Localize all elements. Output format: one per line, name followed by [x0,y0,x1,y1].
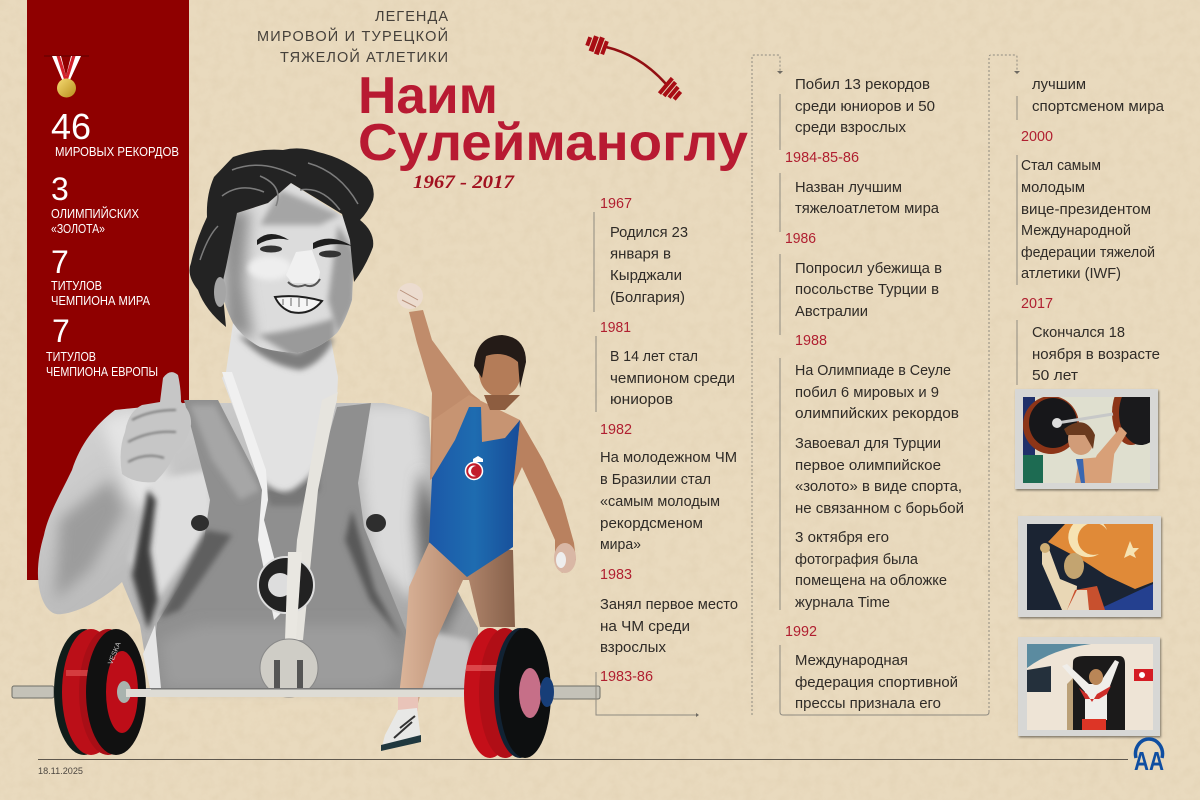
title: athlete name: Сулейманоглу [358,114,748,172]
bar [12,686,600,699]
heading: subtitle: МИРОВОЙ И ТУРЕЦКОЙ [257,27,448,45]
title: athlete name [358,67,748,172]
timeline column 2: посольстве Турции в [795,282,939,298]
timeline column 1: Кырджали [610,268,682,284]
singlet [429,407,520,577]
panel: red statistics column [27,0,189,580]
timeline column 2: олимпийских рекордов [795,406,959,422]
timeline column 2: 1984-85-86 [785,150,859,166]
head [479,347,521,397]
photo: greeting from the aeroplane door [1018,637,1160,736]
stat: 3 Olympic golds [51,171,139,236]
timeline column 1: 1982 [600,422,632,438]
face [222,183,354,353]
stat: 3 Olympic golds: «ЗОЛОТА» [51,221,105,236]
icon: medal [44,56,89,98]
singlet emblem [466,456,483,480]
illustration: barbell [12,628,600,758]
heading: subtitle: ТЯЖЕЛОЙ АТЛЕТИКИ [280,48,448,66]
stat: 7 European titles: 7 [52,313,70,349]
timeline column 3: атлетики (IWF) [1021,266,1121,282]
timeline column 2: Попросил убежища в [795,261,942,277]
right arm [513,420,576,573]
timeline column 2: фотография была [795,552,919,568]
stat: 46 world records: 46 [51,106,91,147]
timeline column 3: 2017 [1021,296,1053,312]
timeline column 3: лучшим [1032,77,1086,93]
stat: 7 world titles: 7 [51,244,69,280]
left plates [54,629,151,755]
stat: 7 European titles: ТИТУЛОВ [46,349,96,364]
timeline column 2: «золото» в виде спорта, [795,479,962,495]
medals [258,557,314,613]
timeline column 1: 1967 [600,196,632,212]
neck and V of chest [222,323,338,498]
stat: 46 world records [51,106,179,159]
timeline column 1: юниоров [610,392,673,408]
raised arm [409,310,480,480]
timeline column 1: января в [610,246,671,262]
timeline column 2: Международная [795,653,908,669]
timeline column 1: мира» [600,537,641,553]
stat: 46 world records: МИРОВЫХ РЕКОРДОВ [55,144,179,159]
torso [432,395,520,490]
timeline column 2: первое олимпийское [795,458,941,474]
stat: 7 world titles: ТИТУЛОВ [51,278,102,293]
timeline column 1: (Болгария) [610,290,685,306]
stat: 3 Olympic golds: 3 [51,171,69,207]
timeline column 2: тяжелоатлетом мира [795,201,940,217]
timeline column 1: На молодежном ЧМ [600,450,737,466]
logo: Anadolu Agency [1134,739,1164,776]
right plates [464,628,554,758]
timeline column 2: 1988 [795,333,827,349]
timeline column 3: молодым [1021,180,1085,196]
illustration: athlete in blue singlet, arm raised [381,283,576,751]
logo: Anadolu Agency: AA [1134,746,1164,776]
timeline column 3: 2000 [1021,129,1053,145]
timeline column 1: в Бразилии стал [600,472,711,488]
timeline column 2: среди юниоров и 50 [795,99,935,115]
timeline column 1: на ЧМ среди [600,619,690,635]
timeline column 3: 50 лет [1032,368,1078,384]
stat: 7 world titles [51,244,150,308]
heading: subtitle: ЛЕГЕНДА [375,9,448,25]
shoe [381,708,421,750]
timeline column 1: Родился 23 [610,225,688,241]
stat: 3 Olympic golds: ОЛИМПИЙСКИХ [51,206,139,221]
icon: curved barbell [584,33,685,104]
title: life dates: 1967 - 2017 [413,172,516,193]
date: 18.11.2025 [38,766,83,777]
legs [398,543,515,707]
stat: 7 European titles: ЧЕМПИОНА ЕВРОПЫ [46,364,158,379]
torso and arm [38,403,478,688]
ear [214,277,226,307]
ribbons [222,372,282,620]
timeline column 3: вице-президентом [1021,202,1151,218]
fist and thumb [121,372,191,482]
timeline column 2 [785,77,964,712]
timeline column 2: 3 октября его [795,530,889,546]
hair [190,148,374,327]
timeline column 1 [600,196,738,685]
timeline connectors [594,55,1017,715]
heading: subtitle [257,9,448,66]
photo: lifting the barbell [1015,381,1163,489]
timeline column 2: На Олимпиаде в Сеуле [795,363,951,379]
timeline column 3: ноября в возрасте [1032,347,1160,363]
timeline column 2: Назван лучшим [795,180,902,196]
arrowheads [696,71,1020,717]
timeline column 1: 1981 [600,320,631,336]
timeline column 2: побил 6 мировых и 9 [795,385,939,401]
timeline column 2: помещена на обложке [795,573,947,589]
timeline column 3: спортсменом мира [1032,99,1165,115]
timeline column 1: взрослых [600,640,667,656]
timeline column 3: Международной [1021,223,1131,239]
timeline column 2: Австралии [795,304,868,320]
timeline column 1: В 14 лет стал [610,349,698,365]
timeline column 1: рекордсменом [600,516,703,532]
illustration: large black-and-white portrait of the athlete [38,148,478,697]
sock [398,697,418,711]
timeline column 3: Стал самым [1021,158,1101,174]
timeline column 3: Скончался 18 [1032,325,1125,341]
timeline column 1: 1983-86 [600,669,653,685]
chest details [191,515,209,531]
photo: waving the Turkish flag [1018,516,1161,617]
title: athlete name: Наим [358,67,498,125]
timeline column 2: 1986 [785,231,816,247]
facial features [257,234,352,249]
footer rule [38,758,1128,760]
timeline column 2: не связанном с борьбой [795,501,964,517]
timeline column 3: федерации тяжелой [1021,245,1155,261]
timeline column 2: Побил 13 рекордов [795,77,930,93]
timeline column 2: Завоевал для Турции [795,436,941,452]
singlet [150,400,410,688]
timeline column 2: среди взрослых [795,120,907,136]
timeline column 2: журнала Time [795,595,890,611]
stat: 7 European titles [46,313,158,379]
timeline column 1: чемпионом среди [610,371,735,387]
stat: 7 world titles: ЧЕМПИОНА МИРА [51,293,150,308]
timeline column 1: «самым молодым [600,494,720,510]
left plates: VESKA [107,641,123,666]
timeline column 1: 1983 [600,567,632,583]
timeline column 2: 1992 [785,624,817,640]
timeline column 2: федерация спортивной [795,675,958,691]
body shading [100,410,170,520]
timeline column 1: Занял первое место [600,597,738,613]
timeline column 3 [1021,77,1165,384]
timeline column 2: прессы признала его [795,696,941,712]
